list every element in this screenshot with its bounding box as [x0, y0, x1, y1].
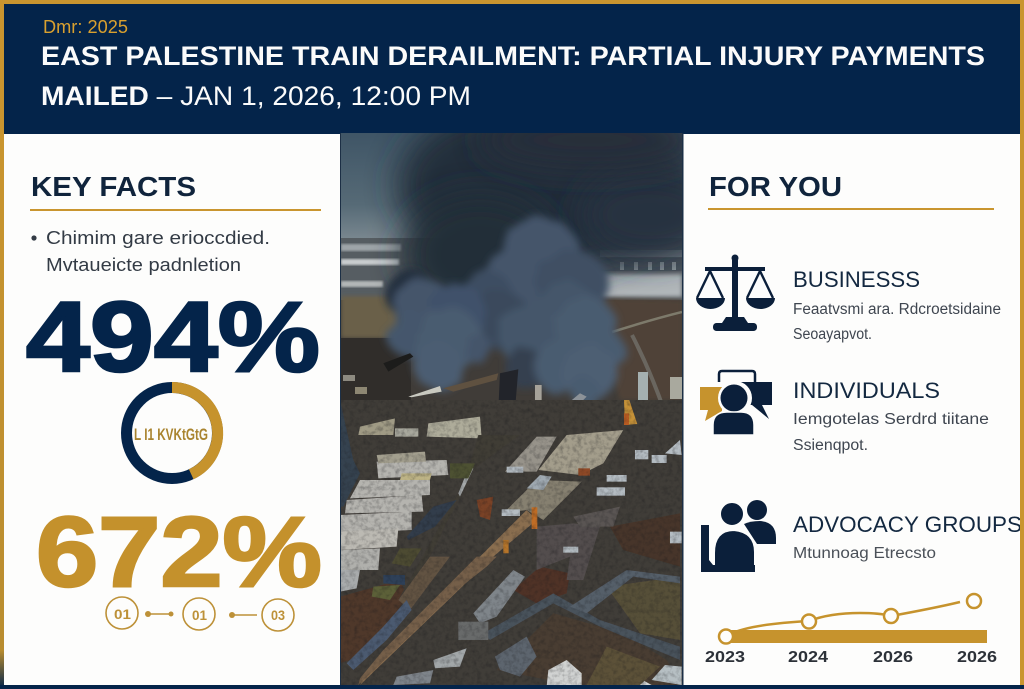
icon: advocacy group people: [701, 500, 776, 572]
lower site: buildings, road and rail: [340, 400, 685, 687]
rail corridor: [400, 435, 482, 598]
left warehouses: [340, 417, 482, 592]
panel: for you: [696, 171, 1022, 666]
brown fields: [341, 296, 682, 410]
bottom right houses: [495, 637, 537, 677]
small grey roofs: [502, 440, 682, 553]
step indicators: 03: [271, 607, 285, 623]
billowing smoke puffs: [384, 216, 625, 406]
central flat yards: [505, 437, 557, 472]
individuals text: Iemgotelas Serdrd tiitane: [793, 411, 989, 428]
icon: individual with speech bubbles: [700, 371, 772, 435]
panel: key facts: [26, 171, 322, 631]
statistic 672%: 672%: [36, 496, 322, 607]
step indicators: 01: [192, 607, 207, 623]
timeline chart: 2026: [957, 649, 997, 666]
bullet text: Chimim gare erioccdied.: [46, 228, 270, 248]
donut chart: L I1 KVKtGtG: [134, 425, 208, 444]
step indicators: [106, 597, 294, 631]
advocacy groups text: Mtunnoag Etrecsto: [793, 545, 936, 562]
header band: [0, 0, 1024, 134]
horizon and water: [341, 238, 682, 300]
green lots: [450, 463, 475, 478]
orange machinery: [532, 507, 537, 529]
individuals text: [793, 378, 989, 454]
header title line two: MAILED – JAN 1, 2026, 12:00 PM: [41, 81, 471, 111]
donut chart: [126, 387, 218, 478]
business text: BUSINESSS: [793, 267, 920, 292]
header date: Dmr: 2025: [43, 17, 128, 37]
scattered rubble: [347, 570, 525, 685]
business text: Seoayapvot.: [793, 326, 872, 343]
timeline chart: 2026: [873, 649, 913, 666]
individuals text: Ssienqpot.: [793, 437, 868, 454]
blue parked trains: [383, 575, 405, 585]
upper dark plume: [378, 133, 682, 290]
key facts heading: KEY FACTS: [31, 171, 196, 202]
statistic 494%: 494%: [26, 281, 320, 392]
timeline chart: 2023: [705, 649, 745, 666]
upper ground debris: [384, 353, 586, 400]
icon: scales of justice: [696, 254, 775, 331]
individuals text: INDIVIDUALS: [793, 378, 940, 403]
advocacy groups text: [793, 512, 1022, 562]
bullet text: Mvtaueicte padnletion: [46, 255, 241, 275]
business text: Feaatvsmi ara. Rdcroetsidaine: [793, 301, 1001, 318]
business text: [793, 267, 1001, 343]
header title line one: EAST PALESTINE TRAIN DERAILMENT: PARTIAL INJURY PAYMENTS: [41, 41, 985, 71]
photo: derailment smoke plume: [341, 133, 682, 685]
bullet text: [31, 228, 270, 275]
advocacy groups text: ADVOCACY GROUPS: [793, 512, 1022, 537]
timeline chart: 2024: [788, 649, 828, 666]
field and lot patches: [341, 584, 404, 662]
photo grain: [341, 400, 682, 685]
step indicators: 01: [114, 606, 131, 622]
for you heading: FOR YOU: [709, 171, 842, 202]
timeline chart: [705, 594, 997, 666]
diagonal dirt road: [360, 510, 537, 685]
